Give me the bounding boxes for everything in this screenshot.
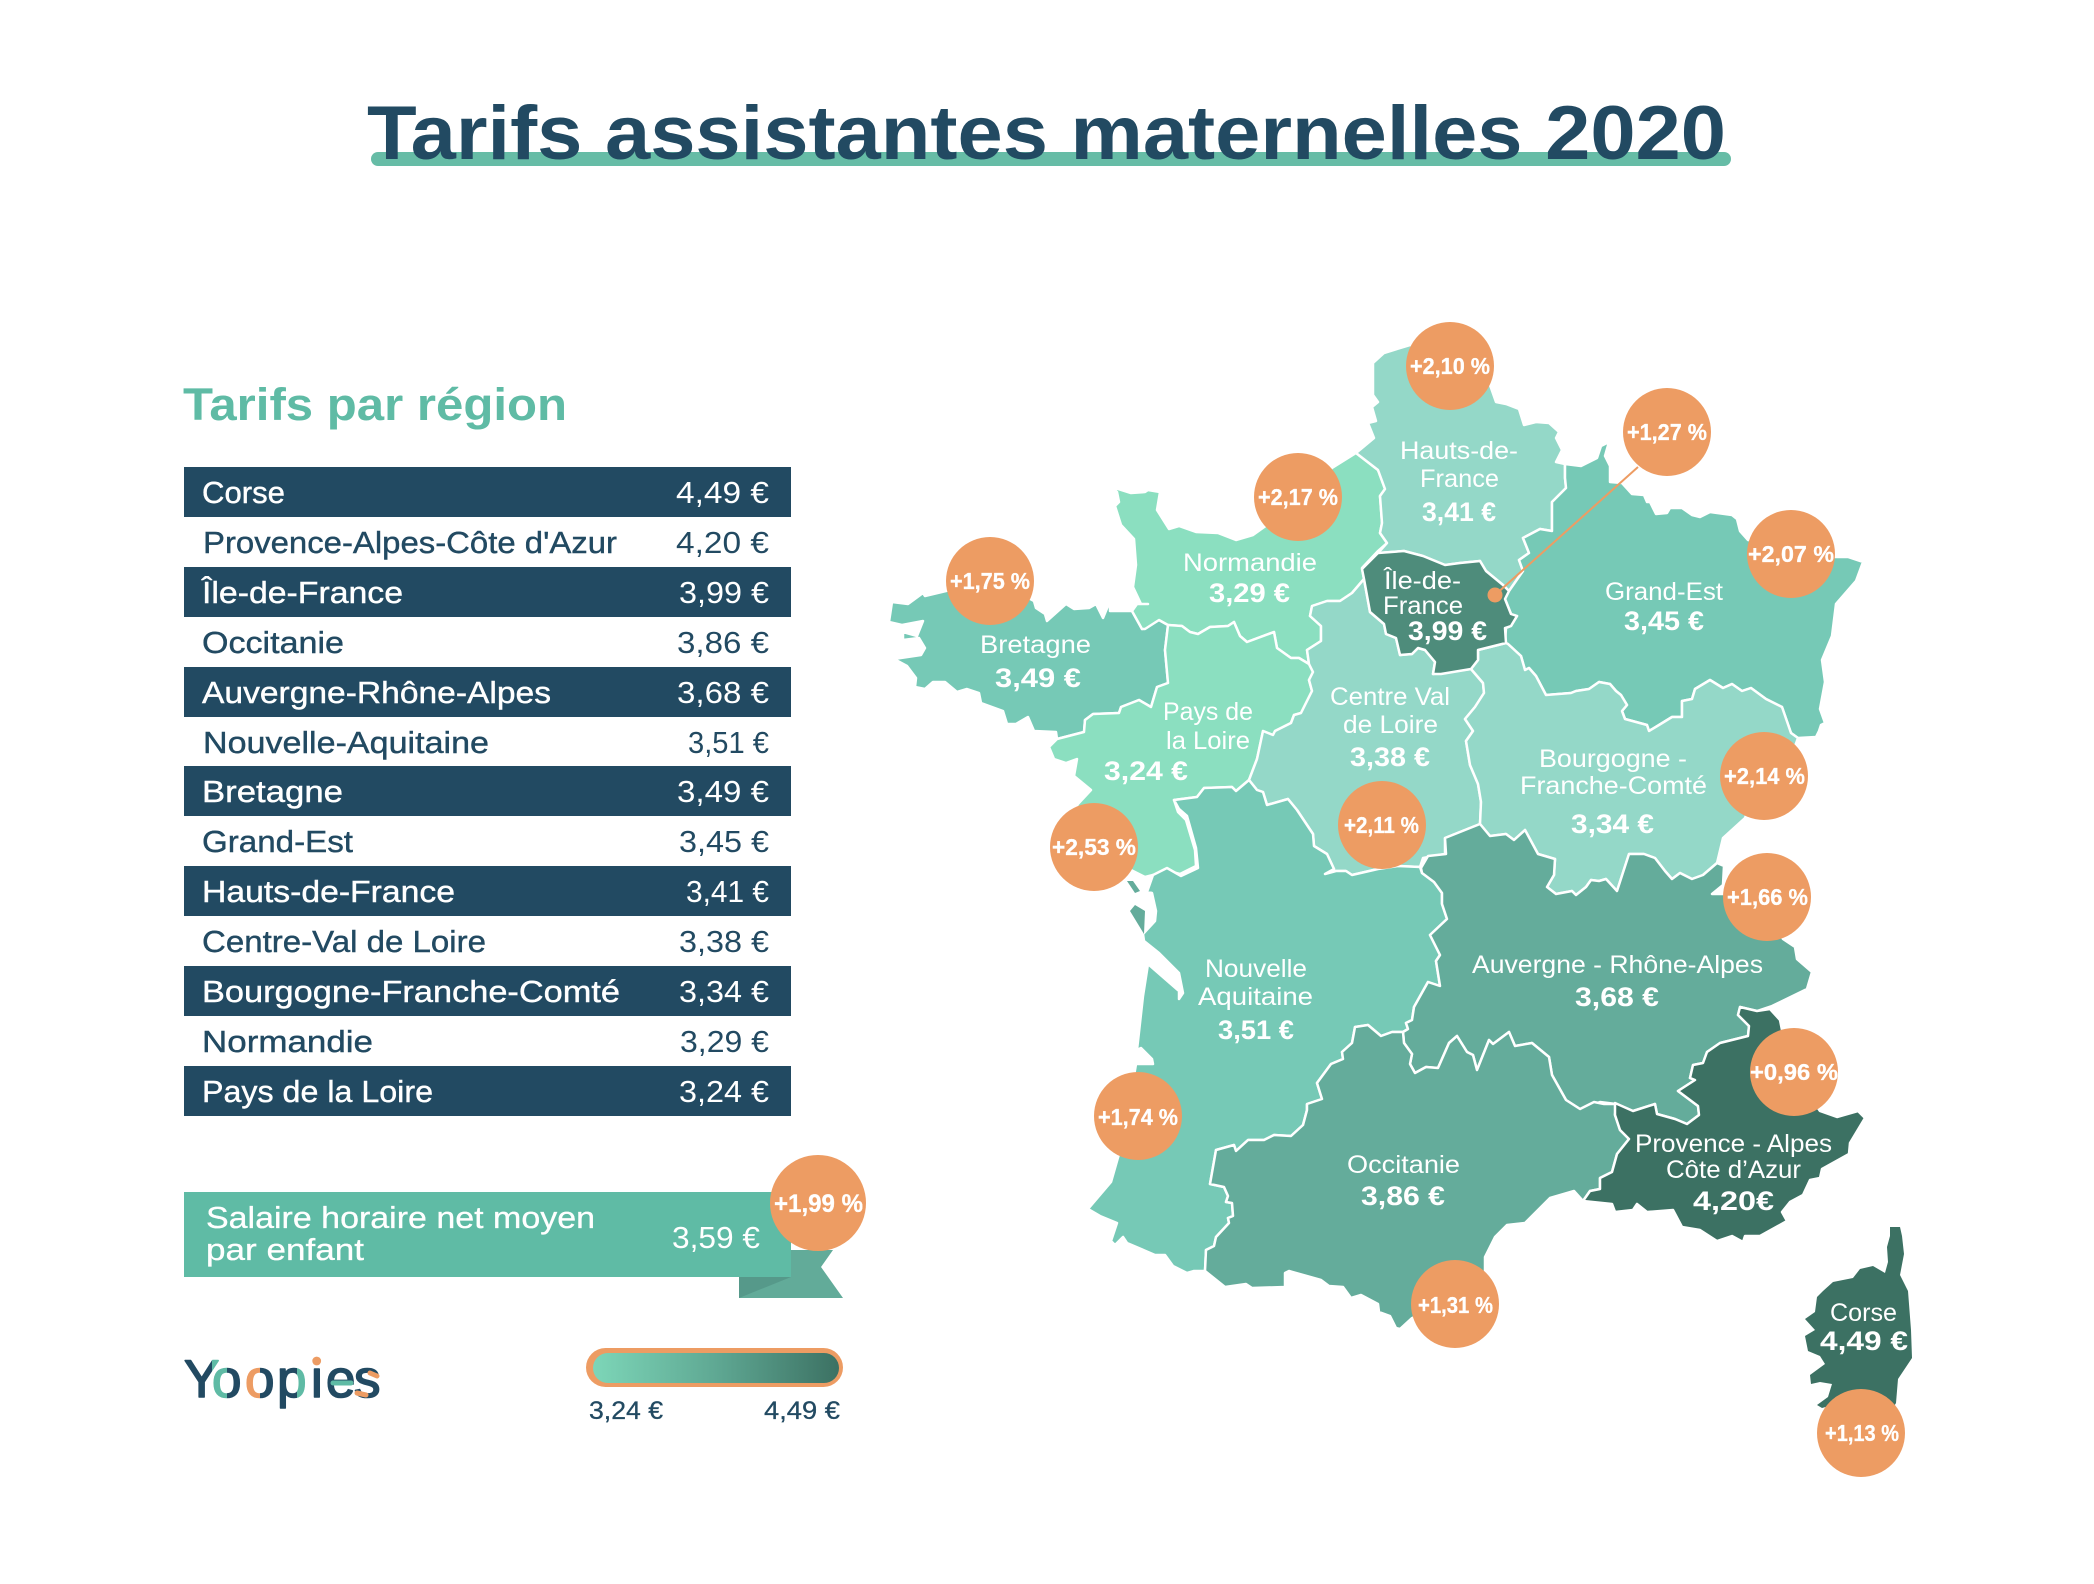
panel: table of rates by region: 3,41 € (686, 874, 769, 909)
region labels: Pays de (1163, 698, 1253, 726)
legend: colour scale: 4,49 € (764, 1397, 840, 1425)
percentage badges: +1,66 % (1727, 884, 1808, 910)
panel: average hourly wage ribbon (184, 1155, 866, 1298)
panel: table of rates by region: Pays de la Loire (202, 1074, 433, 1109)
panel: table of rates by region: Bourgogne-Franche-Comté (202, 974, 620, 1009)
region labels: 3,34 € (1571, 809, 1654, 839)
region labels: 3,41 € (1422, 497, 1496, 527)
leader line: Île-de-France to its badge (1488, 467, 1638, 602)
percentage badges: +2,14 % (1724, 763, 1805, 789)
region labels: Provence - Alpes (1635, 1130, 1832, 1158)
region labels: 3,49 € (995, 663, 1081, 693)
region labels: 3,29 € (1209, 578, 1290, 608)
panel: table of rates by region: Normandie (202, 1024, 373, 1059)
title: Tarifs assistantes maternelles 2020 (367, 91, 1726, 176)
legend: colour scale (586, 1348, 843, 1425)
panel: table of rates by region: Provence-Alpes-Côte d'Azur (203, 525, 617, 560)
panel: table of rates by region: 3,49 € (677, 774, 769, 809)
region: Auvergne-Rhône-Alpes (1403, 824, 1812, 1124)
panel: table of rates by region: Auvergne-Rhône-Alpes (202, 675, 551, 710)
panel: average hourly wage ribbon: +1,99 % (774, 1190, 863, 1218)
region labels: 4,49 € (1820, 1326, 1908, 1356)
region labels: 3,68 € (1575, 982, 1659, 1012)
region labels: 4,20€ (1693, 1186, 1774, 1216)
region: Grand-Est (1505, 442, 1863, 738)
panel: table of rates by region: 3,51 € (688, 725, 769, 760)
panel: table of rates by region: Nouvelle-Aquitaine (203, 725, 489, 760)
percentage badges: +1,75 % (950, 568, 1030, 594)
region labels: 3,45 € (1624, 606, 1704, 636)
region labels: Auvergne - Rhône-Alpes (1472, 951, 1763, 979)
panel: table of rates by region: 3,86 € (677, 625, 769, 660)
panel: table of rates by region: Bretagne (202, 774, 343, 809)
region labels: Bretagne (980, 631, 1091, 659)
region labels: 3,51 € (1218, 1015, 1294, 1045)
panel: table of rates by region: 3,38 € (679, 924, 769, 959)
panel: table of rates by region: 4,20 € (676, 525, 769, 560)
percentage badges: +2,10 % (1410, 353, 1490, 379)
percentage badges: +1,31 % (1418, 1292, 1493, 1318)
region labels: Nouvelle (1205, 955, 1307, 983)
region labels (980, 437, 1908, 1356)
region: Occitanie (1205, 1025, 1629, 1329)
region labels: Occitanie (1347, 1151, 1460, 1179)
panel: table of rates by region: Occitanie (202, 625, 344, 660)
panel: table of rates by region: Centre-Val de Loire (202, 924, 486, 959)
region: Pays de la Loire (1049, 622, 1313, 877)
panel: table of rates by region: 3,99 € (679, 575, 769, 610)
region: Centre-Val de Loire (1249, 579, 1484, 875)
region labels: 3,99 € (1408, 616, 1487, 646)
panel: table of rates by region: 3,68 € (677, 675, 769, 710)
map of France by region (889, 345, 1912, 1430)
percentage badges (946, 322, 1905, 1477)
region labels: Hauts-de- (1400, 437, 1518, 465)
percentage badges: +1,13 % (1825, 1420, 1899, 1446)
region: Bourgogne-Franche-Comté (1465, 643, 1798, 895)
panel: average hourly wage ribbon: Salaire horaire net moyen (206, 1200, 595, 1235)
region labels: France (1420, 465, 1499, 493)
percentage badges: +2,53 % (1052, 834, 1136, 860)
region: Bretagne (889, 577, 1168, 739)
islands: Ré and Oléron (1127, 881, 1145, 934)
region labels: Bourgogne - (1539, 745, 1687, 773)
region labels: de Loire (1343, 711, 1438, 739)
percentage badges: +0,96 % (1750, 1059, 1838, 1085)
panel: table of rates by region: 3,45 € (679, 824, 769, 859)
panel: table of rates by region (184, 467, 791, 1116)
region labels: Côte d’Azur (1666, 1156, 1801, 1184)
region labels: Centre Val (1330, 683, 1450, 711)
logo: Yoopies: Yoopies (184, 1350, 380, 1409)
percentage badges: +1,74 % (1098, 1104, 1178, 1130)
percentage badges: +1,27 % (1627, 419, 1707, 445)
percentage badges: +2,17 % (1258, 484, 1338, 510)
panel: table of rates by region: Grand-Est (202, 824, 353, 859)
heading: tarifs par région: Tarifs par région (183, 379, 567, 430)
region labels: la Loire (1166, 727, 1250, 755)
region labels: Île-de- (1383, 566, 1461, 595)
region: Normandie (1112, 453, 1387, 664)
panel: table of rates by region: 3,34 € (679, 974, 769, 1009)
panel: table of rates by region: 3,29 € (680, 1024, 769, 1059)
percentage badges: +2,07 % (1748, 541, 1834, 567)
region: Corse (1805, 1227, 1912, 1430)
region labels: 3,38 € (1350, 742, 1430, 772)
region: Hauts-de-France (1356, 345, 1566, 591)
region labels: 3,86 € (1361, 1181, 1445, 1211)
panel: table of rates by region: 4,49 € (676, 475, 769, 510)
panel: average hourly wage ribbon: par enfant (206, 1232, 364, 1267)
region labels: Aquitaine (1198, 983, 1313, 1011)
region labels: France (1383, 592, 1463, 620)
region labels: Corse (1830, 1299, 1897, 1327)
panel: table of rates by region: Corse (202, 475, 285, 510)
legend: colour scale: 3,24 € (589, 1397, 663, 1425)
panel: average hourly wage ribbon: 3,59 € (672, 1220, 760, 1255)
region labels: Grand-Est (1605, 578, 1723, 606)
region: Provence-Alpes-Côte d'Azur (1583, 1007, 1865, 1242)
panel: table of rates by region: 3,24 € (679, 1074, 769, 1109)
region labels: Normandie (1183, 549, 1317, 577)
region: Nouvelle-Aquitaine (1088, 780, 1447, 1273)
region labels: Franche-Comté (1520, 772, 1707, 800)
region: Île-de-France (1362, 551, 1517, 674)
panel: table of rates by region: Hauts-de-France (202, 874, 455, 909)
panel: table of rates by region: Île-de-France (201, 575, 403, 610)
region labels: 3,24 € (1104, 756, 1188, 786)
percentage badges: +2,11 % (1344, 812, 1419, 838)
